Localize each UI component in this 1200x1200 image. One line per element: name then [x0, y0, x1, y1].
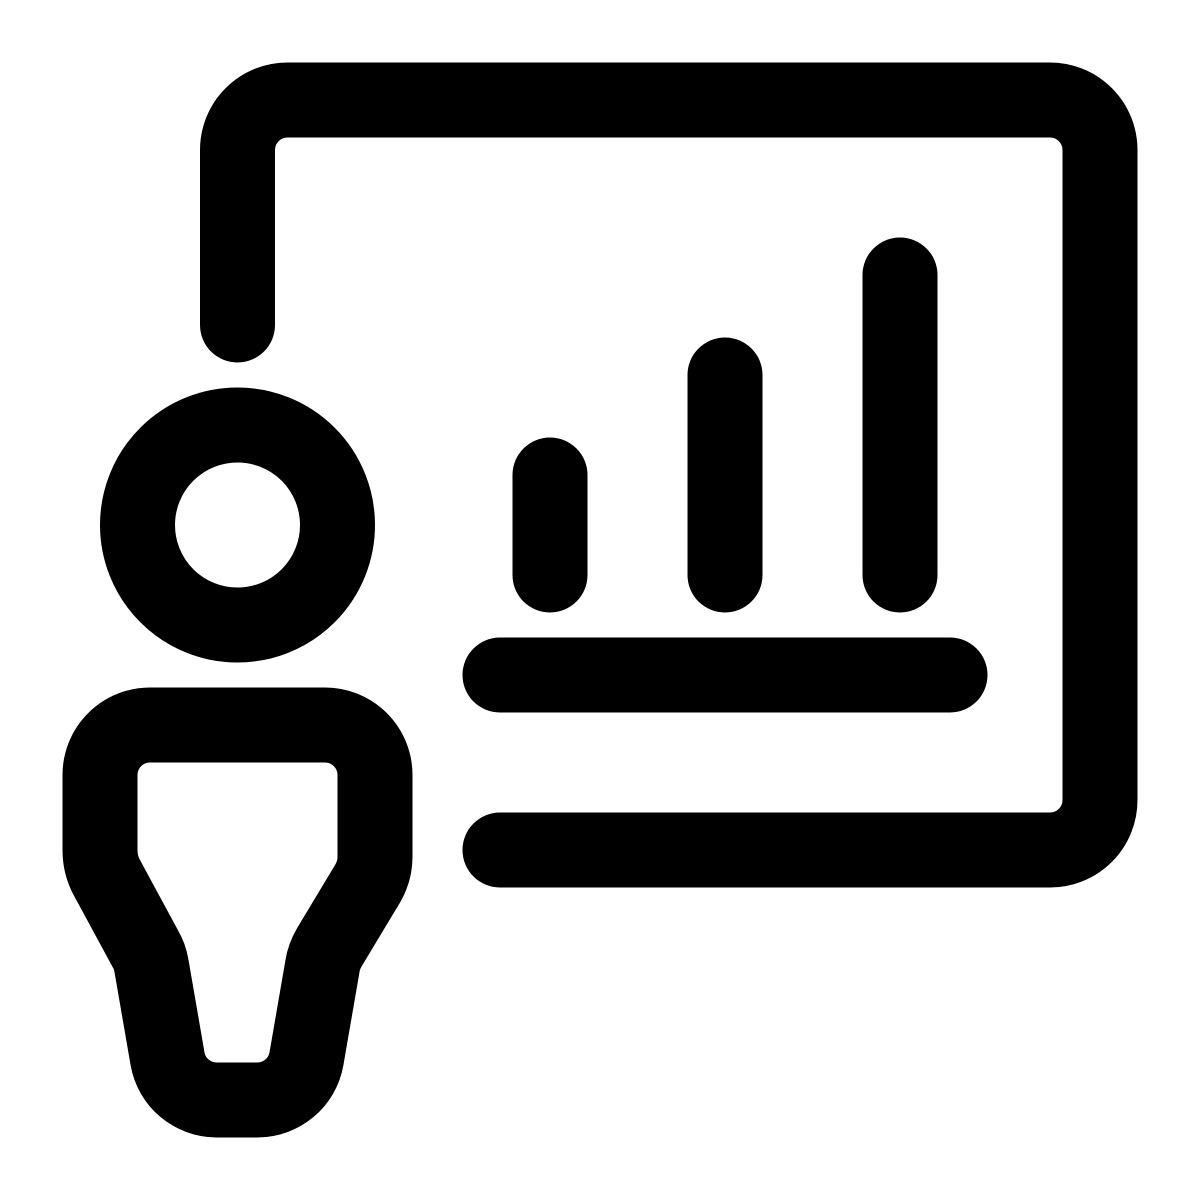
short bar [512, 475, 588, 575]
chart baseline [500, 638, 950, 712]
presenter [100, 425, 375, 1100]
bar chart [500, 275, 950, 675]
presenter body [100, 725, 375, 1100]
tall bar [862, 275, 938, 575]
presentation board outline [238, 100, 1100, 850]
medium bar [688, 375, 762, 575]
presenter head [138, 425, 338, 625]
